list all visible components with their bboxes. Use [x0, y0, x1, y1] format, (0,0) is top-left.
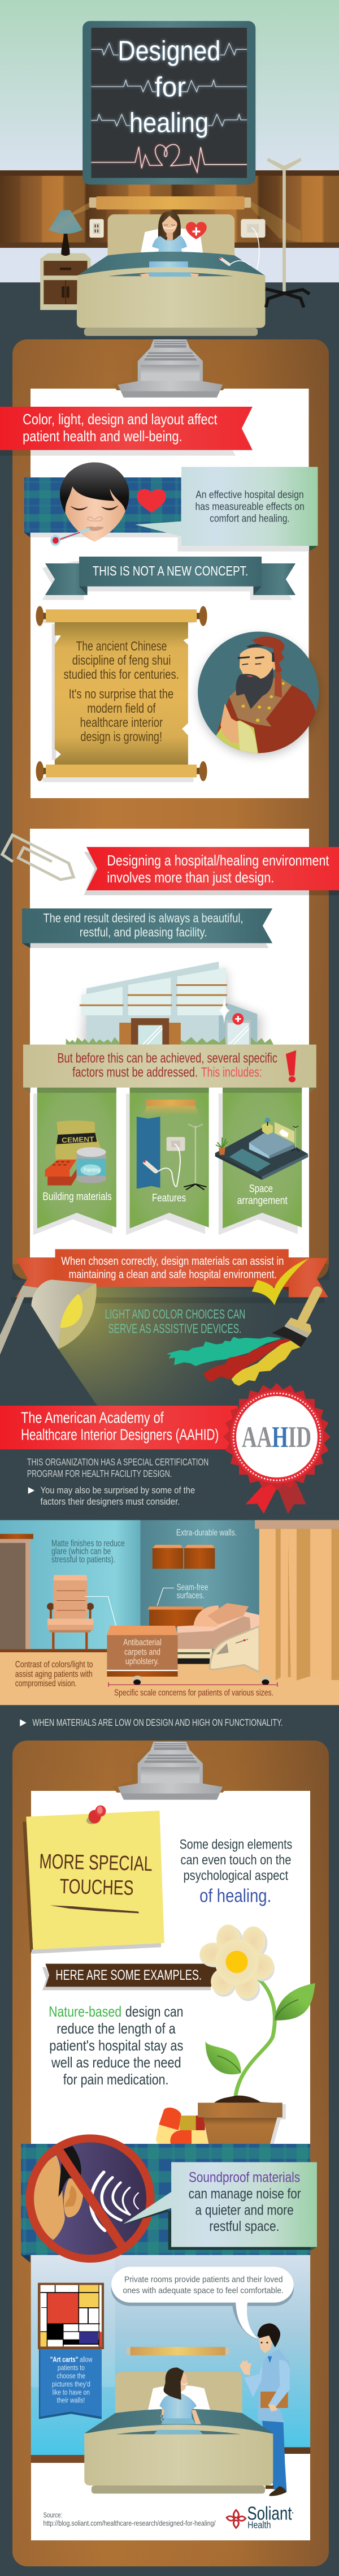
light beam from lamp: [58, 1283, 339, 1406]
certification text: THIS ORGANIZATION HAS A SPECIAL CERTIFICATION: [27, 1457, 208, 1468]
orange ribbon: clean and safe: [11, 1249, 329, 1303]
green card: space arrangement: arrangement: [237, 1195, 288, 1207]
icon: paint brush with strokes: [167, 1291, 318, 1386]
scroll with feng shui text: design is growing!: [80, 730, 162, 744]
icon: red push pin: [86, 1806, 106, 1824]
red banner: designing a hospital: [84, 847, 339, 895]
source text: Source:: [44, 2512, 62, 2519]
bottom room scene back wall: [31, 2255, 310, 2455]
banner: art carts: choose the: [56, 2372, 85, 2380]
icon: paperclip: [2, 835, 73, 880]
hospital bed with patient: [84, 2367, 273, 2493]
red banner: color, light, design: patient health and well-being.: [23, 428, 182, 445]
ceiling light bar: [65, 196, 301, 243]
scale line and note: [108, 1682, 277, 1698]
clipboard 1 paper second sheet: [30, 829, 309, 1257]
carpet and upholstery box: carpets and: [124, 1647, 160, 1657]
banner: art carts: "Art carts" allow: [50, 2356, 93, 2364]
note: matte finishes: glare (which can be: [51, 1547, 111, 1556]
IV pole: [266, 158, 310, 307]
nature-based text: [49, 2004, 183, 2088]
speech bubble: private rooms: [111, 2267, 294, 2340]
ribbon: here are some examples: [42, 1964, 223, 1990]
callout: soundproof materials: can manage noise for: [189, 2186, 301, 2202]
surprise text: [28, 1485, 195, 1507]
section: room diagram: [0, 1485, 339, 1729]
light and color text: LIGHT AND COLOR CHOICES CAN: [105, 1307, 245, 1322]
callout: effective hospital design: An effective hospital design: [195, 489, 304, 501]
certification text: [27, 1457, 208, 1480]
red banner: color, light, design: Color, light, design and layout affect: [23, 411, 218, 428]
icon: heart: [137, 489, 166, 513]
clipboard 1: [12, 339, 329, 1280]
scale line and note: Specific scale concerns for patients of various sizes.: [114, 1688, 273, 1698]
illustration: Chinese scholar in circle: [198, 632, 324, 756]
clipboard 1 paper top sheet: [31, 389, 308, 798]
section: design factors: [22, 908, 316, 1235]
banner: art carts: like to have on: [53, 2388, 90, 2397]
source text: [44, 2512, 216, 2528]
icon: flower in pot with pills: [156, 1924, 315, 2151]
green card: space arrangement: [215, 1088, 308, 1235]
callout: soundproof materials: Soundproof materials: [189, 2169, 300, 2185]
text: psychological aspect: psychological aspect: [183, 1868, 288, 1883]
section: feng shui: [2, 606, 339, 895]
badge: AAHID seal: AAHID: [242, 1421, 311, 1454]
icon: desk lamp: [0, 1280, 97, 1355]
callout: soundproof materials: a quieter and more: [195, 2202, 294, 2218]
red banner: American Academy: [0, 1406, 238, 1449]
callout: effective hospital design: comfort and healing.: [210, 513, 290, 524]
callout: soundproof materials: [123, 2162, 317, 2251]
green card: building materials: Building materials: [42, 1191, 112, 1203]
header illustration: monitor, bed and patient: [40, 21, 310, 336]
patient: [147, 211, 192, 268]
bedside table with lamp: [40, 210, 91, 310]
headboard and pillow: [108, 214, 234, 264]
logo: Soliant Health: [227, 2503, 293, 2530]
scroll with feng shui text: studied this for centuries.: [63, 667, 179, 682]
note: extra-durable walls: Extra-durable walls.: [176, 1528, 237, 1537]
note: seam-free surfaces: Seam-free: [177, 1583, 208, 1592]
room walls and floor: [0, 1520, 339, 1705]
badge: AAHID seal: [223, 1383, 331, 1514]
light and color text: SERVE AS ASSISTIVE DEVICES.: [108, 1322, 241, 1336]
icon: exclamation mark: [286, 1050, 296, 1082]
tan banner: before this can be achieved: factors must be addressed.: [72, 1065, 198, 1080]
monitor with title: Designed: [118, 36, 220, 66]
teal banner: end result: [22, 908, 272, 948]
scroll with feng shui text: healthcare interior: [80, 716, 163, 730]
teal banner: end result: The end result desired is always a beautiful,: [44, 912, 243, 925]
red banner: American Academy: The American Academy of: [21, 1410, 164, 1427]
heart with cross icon: [186, 222, 207, 239]
scroll with feng shui text: modern field of: [87, 701, 156, 716]
icon: sick patient face: [50, 462, 129, 546]
carpet and upholstery box: [107, 1626, 178, 1677]
banner: art carts: patients to: [58, 2364, 85, 2372]
bed with table and pillows: [147, 1603, 259, 1672]
green card: building materials: [33, 1088, 116, 1235]
section: private room scene: [31, 2267, 310, 2530]
tan banner: before this can be achieved: [23, 1045, 316, 1093]
tan banner: before this can be achieved: This includes:: [201, 1065, 262, 1080]
curtain: [255, 1520, 339, 1681]
ceiling light: [127, 2347, 229, 2355]
note: contrast of colors: [15, 1659, 93, 1688]
baseboard: [31, 2447, 310, 2463]
banner: art carts: [39, 2349, 102, 2419]
light and color text: [105, 1307, 245, 1336]
monitor with title: for: [155, 72, 186, 102]
section: more special touches: [23, 1806, 315, 2151]
nature-based text: patient's hospital stay as: [49, 2037, 183, 2054]
nature-based text: Nature-based: [49, 2004, 121, 2020]
banner: art carts: their walls!: [57, 2397, 85, 2405]
section: light and colour: [0, 1249, 339, 1480]
green card: building materials: Painting: [84, 1167, 100, 1173]
plaid band: [24, 477, 181, 537]
painting: Mondrian: [38, 2283, 104, 2349]
red banner: designing a hospital: involves more than just design.: [107, 869, 274, 886]
section: patient health: [0, 407, 318, 600]
carpet and upholstery box: Antibacterial: [123, 1638, 162, 1647]
text: psychological aspect: [180, 1837, 292, 1906]
note: contrast of colors: compromised vision.: [15, 1678, 77, 1688]
text: psychological aspect: of healing.: [199, 1885, 271, 1906]
plaid band 2: [21, 2144, 310, 2263]
surprise text: factors their designers must consider.: [41, 1496, 180, 1507]
icon: no sound ear: [26, 2134, 155, 2263]
speech bubble: private rooms: Private rooms provide patients and their loved: [124, 2275, 283, 2284]
note: contrast of colors: Contrast of colors/light to: [15, 1659, 93, 1669]
teal banner: end result: restful, and pleasing facility.: [80, 926, 207, 940]
logo: Soliant Health: Health: [247, 2519, 271, 2530]
red banner: American Academy: Healthcare Interior Designers (AAHID): [21, 1427, 219, 1444]
scroll with feng shui text: It's no surprise that the: [69, 687, 173, 701]
icon: check mark: [252, 1259, 308, 1305]
sticky note: [23, 1811, 164, 1954]
sticky note: MORE SPECIAL: [39, 1850, 153, 1876]
green card: space arrangement: Space: [249, 1183, 273, 1195]
wall cabinets: [153, 1545, 215, 1569]
certification text: PROGRAM FOR HEALTH FACILITY DESIGN.: [27, 1468, 172, 1480]
ribbon: this is not a new concept: THIS IS NOT A NEW CONCEPT.: [93, 564, 248, 579]
green card: features: Features: [152, 1192, 186, 1204]
doctor: [240, 2323, 290, 2496]
nature-based text: design can: [125, 2004, 183, 2020]
note: seam-free surfaces: [157, 1583, 208, 1606]
illustration: hospital building: [66, 962, 273, 1045]
door: [0, 1534, 33, 1649]
scroll with feng shui text: discipline of feng shui: [72, 653, 171, 668]
carpet and upholstery box: upholstery.: [125, 1657, 159, 1666]
power outlets: [89, 219, 266, 238]
scroll with feng shui text: [36, 606, 207, 782]
nature-based text: reduce the length of a: [56, 2021, 176, 2037]
green card: features: [126, 1088, 209, 1235]
section: soundproof materials: [21, 2134, 317, 2455]
red banner: color, light, design: [0, 407, 253, 456]
clipboard 2: [12, 1741, 329, 2566]
clipboard 2 metal clip: [112, 1742, 228, 1800]
text: psychological aspect: can even touch on the: [181, 1853, 291, 1868]
banner: art carts: pictures they'd: [52, 2380, 90, 2389]
text: psychological aspect: Some design elements: [180, 1837, 292, 1852]
scroll with feng shui text: The ancient Chinese: [76, 639, 167, 654]
sticky note: TOUCHES: [59, 1875, 134, 1899]
ribbon: this is not a new concept: [42, 557, 295, 600]
monitor with title: healing: [129, 107, 208, 138]
note: matte finishes: stressful to patients).: [51, 1555, 115, 1565]
note: matte finishes: Matte finishes to reduce: [51, 1539, 125, 1548]
clipboard 1 metal clip: [112, 339, 228, 398]
ribbon: here are some examples: HERE ARE SOME EXAMPLES.: [55, 1967, 202, 1983]
logo: Soliant Health: Soliant: [247, 2503, 292, 2524]
note: matte finishes: [51, 1539, 125, 1565]
callout: soundproof materials: restful space.: [209, 2219, 279, 2234]
nature-based text: for pain medication.: [63, 2071, 168, 2088]
speech bubble: private rooms: ones with adequate space to feel comfortable.: [123, 2286, 284, 2295]
bed: [77, 228, 266, 336]
nature-based text: well as reduce the need: [51, 2054, 181, 2071]
green card: building materials: CEMENT: [62, 1135, 94, 1144]
source text: http://blog.soliant.com/healthcare-research/designed-for-healing/: [44, 2519, 216, 2528]
note: seam-free surfaces: surfaces.: [177, 1591, 205, 1600]
note: contrast of colors: assist aging patients with: [15, 1668, 93, 1679]
wheels: [132, 1675, 271, 1685]
monitor with title: [82, 21, 255, 184]
callout: effective hospital design: [135, 467, 318, 552]
chair: [47, 1575, 120, 1650]
surprise text: You may also be surprised by some of the: [41, 1485, 195, 1496]
clipboard 2 paper: [31, 1791, 310, 2540]
